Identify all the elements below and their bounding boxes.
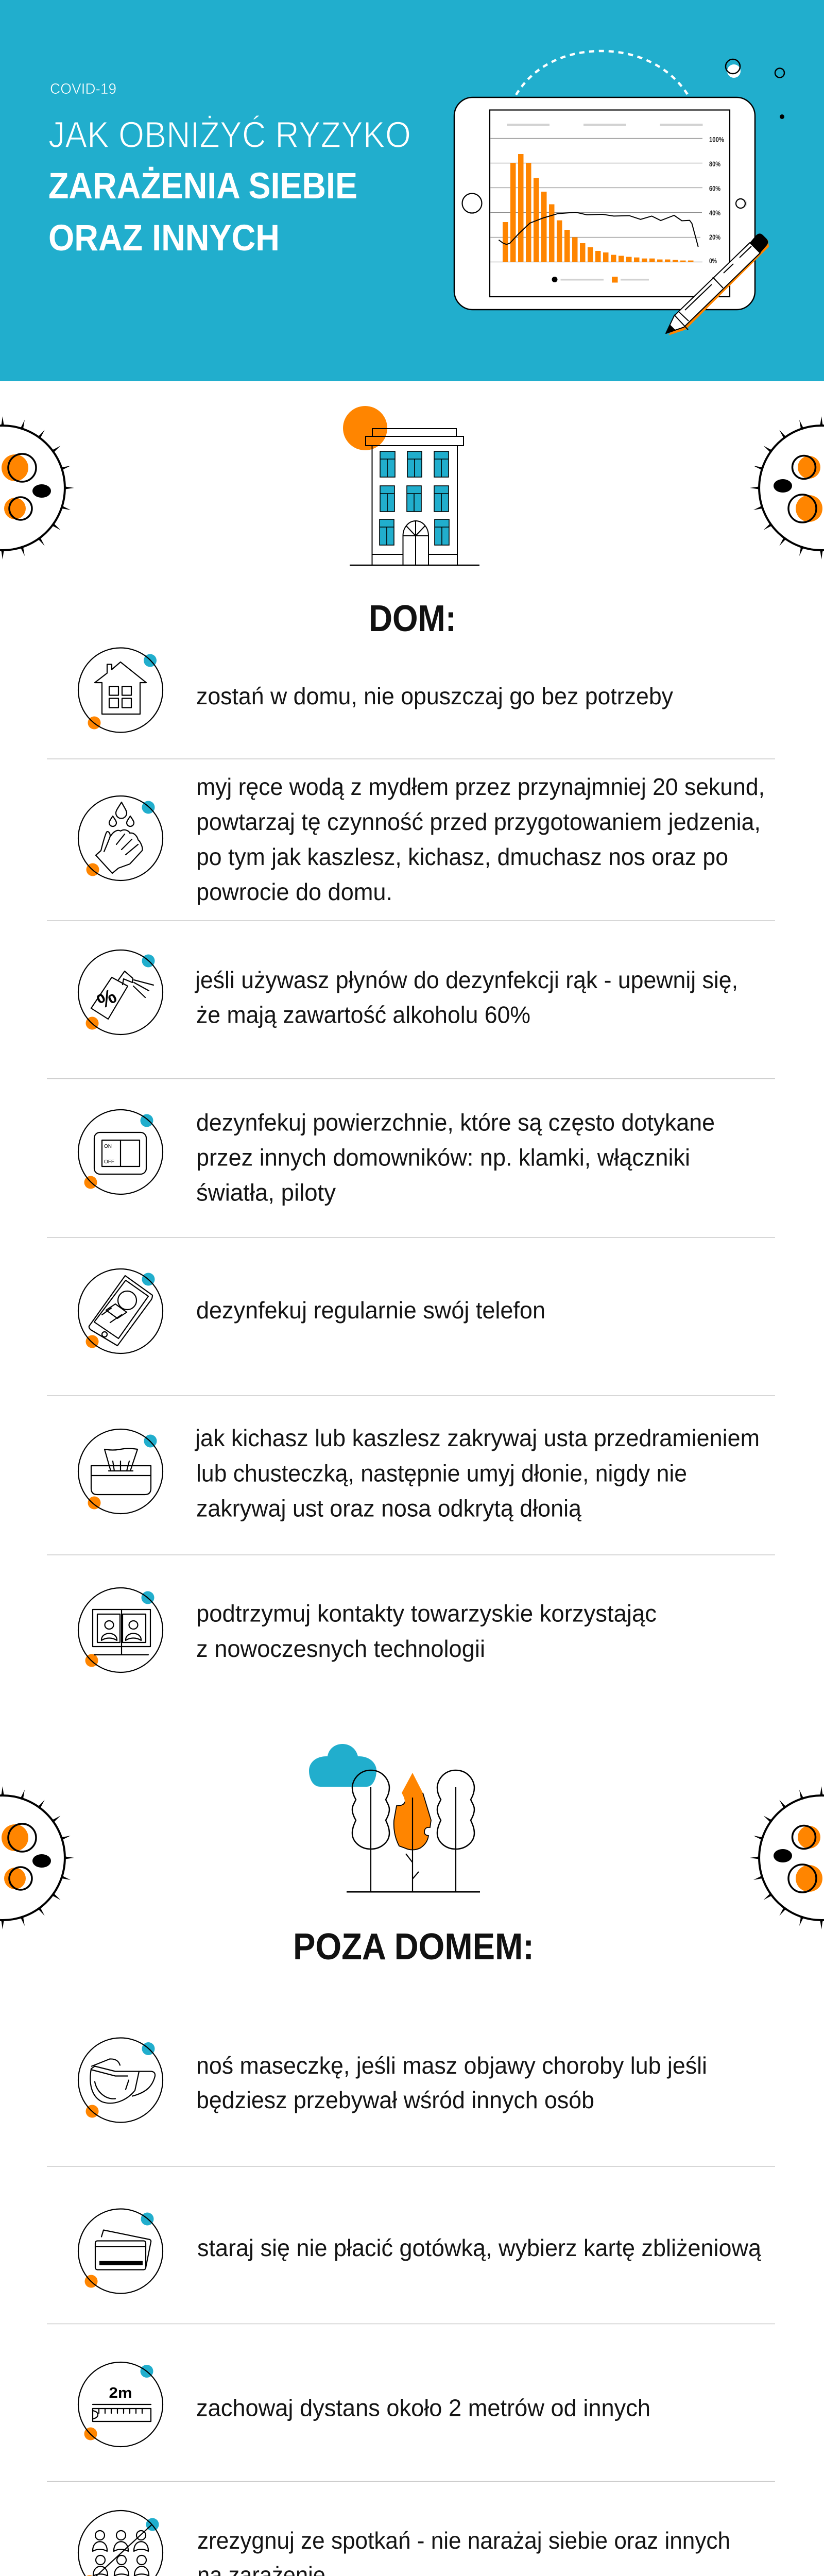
icon: light switch: OFF: [104, 1159, 114, 1165]
icon: payment cards: [78, 2209, 163, 2294]
text: że mają zawartość alkoholu 60%: [196, 1002, 530, 1028]
tablet with chart: [454, 97, 755, 310]
icon: house: [78, 648, 163, 733]
icon: tissue box: [78, 1429, 163, 1514]
icon: video call: [78, 1588, 163, 1672]
icon: light switch: ON: [104, 1144, 112, 1149]
virus: top left: [0, 416, 74, 560]
icon: phone: [78, 1269, 163, 1353]
text: lub chusteczką, następnie umyj dłonie, nigdy nie: [196, 1460, 687, 1487]
text: dezynfekuj regularnie swój telefon: [196, 1297, 545, 1324]
text: zrezygnuj ze spotkań - nie narażaj siebie oraz innych: [197, 2527, 730, 2554]
icon: trees and cloud: [309, 1744, 480, 1892]
title: ORAZ INNYCH: [48, 218, 280, 259]
text: zachowaj dystans około 2 metrów od innych: [196, 2395, 650, 2421]
icon: face mask: [78, 2038, 163, 2123]
title: ZARAŻENIA SIEBIE: [48, 166, 357, 207]
row: pay by card: [78, 2209, 761, 2294]
text: [196, 1600, 657, 1662]
bar chart: 20%: [709, 233, 720, 241]
text: [197, 2527, 730, 2576]
text: myj ręce wodą z mydłem przez przynajmniej 20 sekund,: [196, 773, 765, 800]
heading: POZA DOMEM: POZA DOMEM:: [293, 1926, 534, 1968]
text: jeśli używasz płynów do dezynfekcji rąk - upewnij się,: [194, 967, 738, 993]
text: zakrywaj ust oraz nosa odkrytą dłonią: [196, 1495, 581, 1522]
header banner: [0, 0, 824, 381]
icon: hands and drops: [78, 796, 163, 880]
row: cover mouth: [78, 1425, 760, 1522]
bar chart: 40%: [709, 209, 720, 217]
icon: spray bottle: %: [93, 985, 121, 1013]
row: stay at home: [78, 648, 673, 733]
icon: spray bottle: [78, 950, 163, 1035]
row: wear mask: [78, 2038, 707, 2123]
icon: 2 m ruler: [78, 2362, 163, 2447]
text: powrocie do domu.: [196, 878, 392, 905]
icon: crossed-out group: [78, 2511, 163, 2576]
heading: DOM: DOM:: [369, 598, 456, 639]
text: jak kichasz lub kaszlesz zakrywaj usta przedramieniem: [194, 1425, 760, 1451]
chart header placeholders: [507, 124, 702, 126]
text: [194, 1425, 760, 1522]
chart legend: [552, 277, 649, 282]
pencil: [666, 233, 769, 335]
text: z nowoczesnych technologii: [196, 1635, 485, 1662]
text: staraj się nie płacić gotówką, wybierz kartę zbliżeniową: [197, 2234, 761, 2261]
title: JAK OBNIŻYĆ RYZYKO: [48, 115, 411, 156]
virus: middle right: [750, 1786, 824, 1929]
text: światła, piloty: [196, 1179, 336, 1206]
bar chart: 80%: [709, 160, 720, 168]
text: [194, 967, 738, 1028]
icon: light switch: [78, 1110, 163, 1194]
text: noś maseczkę, jeśli masz objawy choroby lub jeśli: [196, 2052, 707, 2079]
text: będziesz przebywał wśród innych osób: [196, 2087, 594, 2113]
row: wash hands: [78, 773, 765, 905]
row: cancel meetings: [78, 2511, 730, 2576]
row: keep in touch: [78, 1588, 657, 1672]
text: powtarzaj tę czynność przed przygotowaniem jedzenia,: [196, 808, 761, 835]
text: zostań w domu, nie opuszczaj go bez potrzeby: [196, 683, 673, 709]
bar chart: 100%: [709, 136, 724, 143]
text: dezynfekuj powierzchnie, które są często dotykane: [196, 1109, 715, 1136]
row: hand sanitizer: [78, 950, 738, 1035]
title: [48, 115, 411, 259]
row: disinfect surfaces: [78, 1109, 715, 1206]
text: przez innych domowników: np. klamki, włączniki: [196, 1144, 690, 1171]
virus: middle left: [0, 1786, 74, 1929]
decorative dots: [726, 59, 784, 119]
text: [196, 773, 765, 905]
row: keep distance: [78, 2362, 650, 2447]
dashed arc: [516, 51, 689, 97]
icon: building: [343, 406, 479, 565]
bar chart: [490, 136, 724, 265]
bar chart: 60%: [709, 184, 720, 193]
text: [196, 1109, 715, 1206]
text: podtrzymuj kontakty towarzyskie korzystając: [196, 1600, 657, 1627]
eyebrow: COVID-19: COVID-19: [50, 81, 116, 97]
text: po tym jak kaszlesz, kichasz, dmuchasz nos oraz po: [196, 843, 728, 870]
row: disinfect phone: [78, 1269, 545, 1353]
bar chart: 0%: [709, 257, 717, 265]
virus: top right: [750, 416, 824, 560]
icon: 2 m ruler: 2m: [109, 2385, 132, 2401]
text: [196, 2052, 707, 2113]
